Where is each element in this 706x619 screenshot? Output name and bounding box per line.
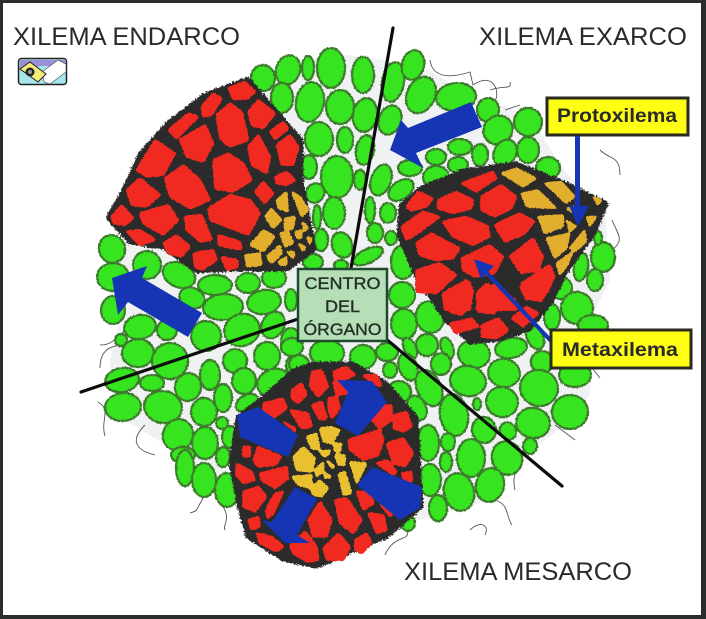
exarch xylem bundle xyxy=(398,163,607,343)
endarch xylem bundle xyxy=(107,78,315,272)
title: mesarch xylem: XILEMA MESARCO xyxy=(404,558,632,586)
protoxylem cells xyxy=(292,427,367,497)
label: metaxylem: Metaxilema xyxy=(562,340,678,361)
bundle outline xyxy=(230,363,422,567)
protoxylem cells xyxy=(501,168,601,275)
box: centre of the organ: ÓRGANO xyxy=(304,320,382,339)
bundle outline xyxy=(107,78,315,272)
green parenchyma cells xyxy=(95,48,615,531)
arrow: protoxylem pointer xyxy=(569,136,589,226)
mesarch xylem bundle xyxy=(230,363,422,567)
label: protoxylem: Protoxilema xyxy=(557,106,677,127)
metaxylem cells xyxy=(401,172,555,310)
arrow: exarch growth direction, top xyxy=(390,102,482,168)
icon: camera and photos xyxy=(18,58,66,84)
lower metaxylem cells xyxy=(443,280,552,338)
title: exarch xylem: XILEMA EXARCO xyxy=(479,23,687,51)
arrow: metaxylem pointer xyxy=(474,259,552,342)
metaxylem cells xyxy=(236,367,413,562)
background tissue xyxy=(105,55,610,540)
protoxylem cells xyxy=(245,192,312,267)
dividing lines between xylem types xyxy=(81,28,562,486)
label: metaxylem xyxy=(551,330,691,368)
box: centre of the organ: DEL xyxy=(325,297,360,316)
diagram: vascular tissue cross section xyxy=(81,28,620,567)
metaxylem cells xyxy=(112,82,298,270)
title: endarch xylem: XILEMA ENDARCO xyxy=(13,23,240,51)
arrows: mesarch growth directions xyxy=(237,380,422,543)
bundle outline xyxy=(398,163,607,343)
arrow: endarch growth direction, left xyxy=(112,266,202,337)
box: centre of the organ xyxy=(298,269,387,341)
label: protoxylem xyxy=(547,98,688,135)
box: centre of the organ: CENTRO xyxy=(304,274,380,293)
thin cell wall wisps xyxy=(98,60,620,555)
